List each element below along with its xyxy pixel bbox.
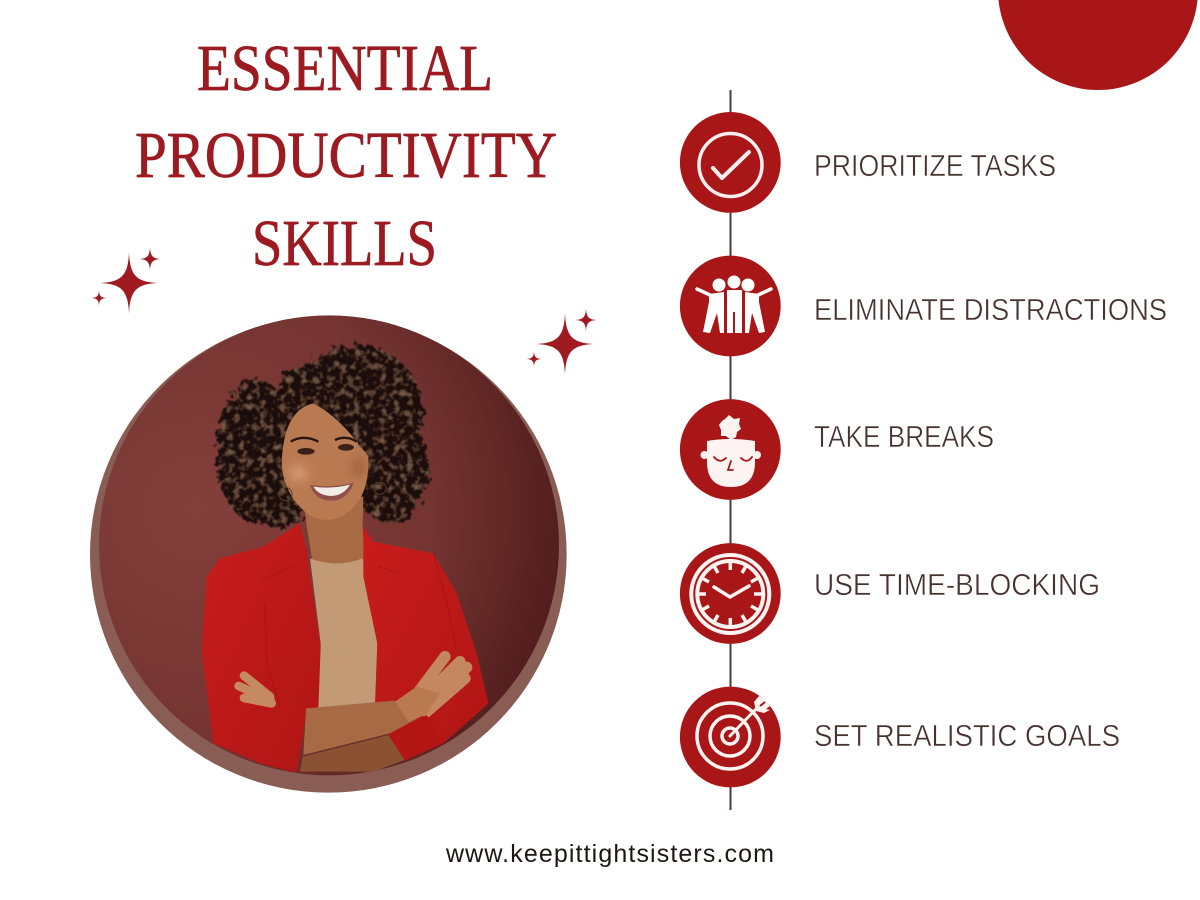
step 4: use time-blocking: USE TIME-BLOCKING	[814, 568, 1100, 602]
title: PRODUCTIVITY	[135, 119, 557, 192]
left hand fingers	[239, 676, 272, 703]
mouth	[310, 483, 354, 501]
face	[282, 403, 368, 520]
eyes and brows	[291, 438, 318, 442]
title	[135, 32, 557, 280]
website url: www.keepittightsisters.com	[445, 840, 774, 868]
title: ESSENTIAL	[197, 32, 493, 105]
icon: target with arrow	[680, 687, 781, 787]
step 3: take breaks: TAKE BREAKS	[814, 420, 994, 454]
step 4: use time-blocking	[680, 543, 1100, 644]
hair front lock	[313, 383, 382, 447]
step 1: prioritize tasks	[680, 112, 1056, 213]
icon: calm head with puzzle piece	[680, 399, 781, 500]
step 5: set realistic goals	[680, 687, 1120, 787]
decorative corner circle	[998, 0, 1198, 90]
icon: check mark in circle	[680, 112, 781, 213]
forearms and hands	[303, 701, 427, 755]
neck	[303, 497, 365, 567]
hair	[217, 345, 428, 528]
title: SKILLS	[252, 207, 437, 280]
icon: left sparkles	[91, 247, 161, 314]
icon: clock	[680, 543, 781, 644]
right cuff	[388, 715, 443, 761]
timeline line	[730, 90, 732, 810]
step 1: prioritize tasks: PRIORITIZE TASKS	[814, 149, 1056, 183]
icon: right sparkles	[526, 308, 597, 375]
icon: group of people	[680, 256, 781, 356]
step 2: eliminate distractions: ELIMINATE DISTRACTIONS	[814, 293, 1167, 327]
earrings	[279, 487, 292, 501]
shirt	[310, 558, 377, 710]
step 5: set realistic goals: SET REALISTIC GOALS	[814, 719, 1120, 753]
jacket	[202, 523, 488, 773]
step 3: take breaks	[680, 399, 994, 500]
step 2: eliminate distractions	[680, 256, 1167, 356]
photo: portrait of a smiling woman	[90, 310, 567, 793]
